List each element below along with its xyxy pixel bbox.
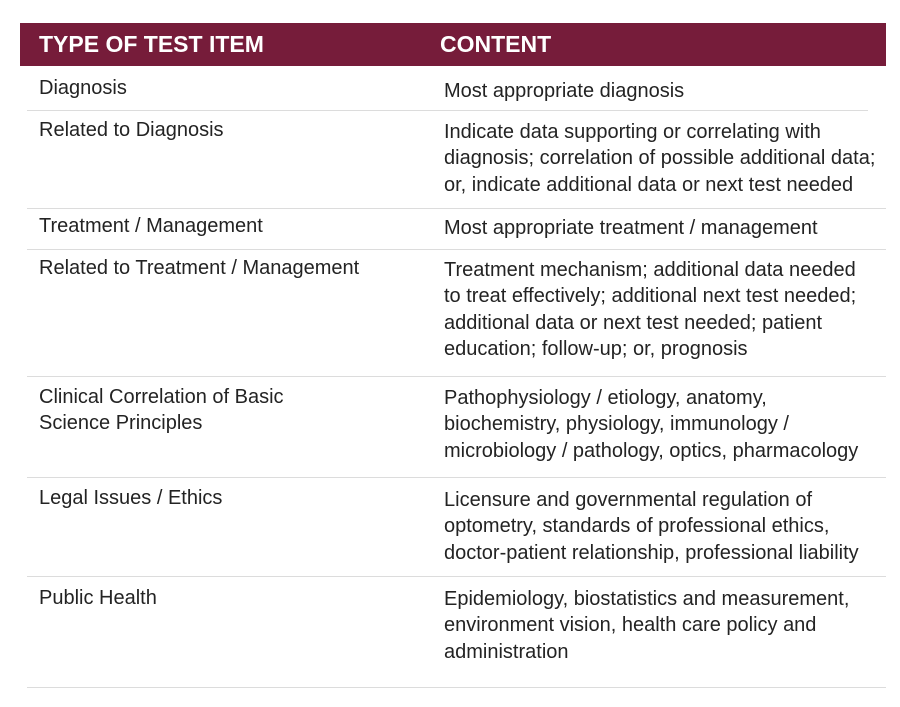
content: public health: administration xyxy=(444,641,569,663)
content: related to treatment: additional data or next test needed; patient xyxy=(444,312,822,334)
content: clinical correlation: Pathophysiology / etiology, anatomy, xyxy=(444,387,767,409)
row: clinical correlation xyxy=(39,386,284,434)
content: diagnosis: Most appropriate diagnosis xyxy=(444,80,684,102)
content: related to treatment: education; follow-up; or, prognosis xyxy=(444,338,748,360)
row: clinical correlation: Science Principles xyxy=(39,412,202,434)
content: legal: Licensure and governmental regulation of xyxy=(444,489,812,511)
content: clinical correlation xyxy=(444,387,858,462)
row: clinical correlation: Clinical Correlation of Basic xyxy=(39,386,284,408)
row: diagnosis: Diagnosis xyxy=(39,77,127,99)
content: related to treatment: Treatment mechanism; additional data needed xyxy=(444,259,856,281)
content: related to treatment: to treat effectively; additional next test needed; xyxy=(444,285,856,307)
content: clinical correlation: biochemistry, physiology, immunology / xyxy=(444,413,789,435)
content: treatment: Most appropriate treatment / management xyxy=(444,217,818,239)
header: type of test item: TYPE OF TEST ITEM xyxy=(39,31,264,57)
content: related to diagnosis: Indicate data supporting or correlating with xyxy=(444,121,821,143)
row: treatment: Treatment / Management xyxy=(39,215,263,237)
row: related to treatment: Related to Treatment / Management xyxy=(39,257,359,279)
content: related to diagnosis xyxy=(444,121,875,196)
content: legal: optometry, standards of professional ethics, xyxy=(444,515,829,537)
header: content: CONTENT xyxy=(440,31,551,57)
content: related to diagnosis: diagnosis; correlation of possible additional data; xyxy=(444,147,875,169)
row: legal: Legal Issues / Ethics xyxy=(39,487,222,509)
content: legal: doctor-patient relationship, professional liability xyxy=(444,542,859,564)
row: related to diagnosis: Related to Diagnosis xyxy=(39,119,224,141)
content: related to diagnosis: or, indicate additional data or next test needed xyxy=(444,174,853,196)
content: clinical correlation: microbiology / pathology, optics, pharmacology xyxy=(444,440,858,462)
content: public health: Epidemiology, biostatistics and measurement, xyxy=(444,588,849,610)
content: public health xyxy=(444,588,849,663)
row: public health: Public Health xyxy=(39,587,157,609)
content: related to treatment xyxy=(444,259,856,360)
content: legal xyxy=(444,489,859,564)
content: public health: environment vision, health care policy and xyxy=(444,614,816,636)
header bar xyxy=(20,23,886,66)
